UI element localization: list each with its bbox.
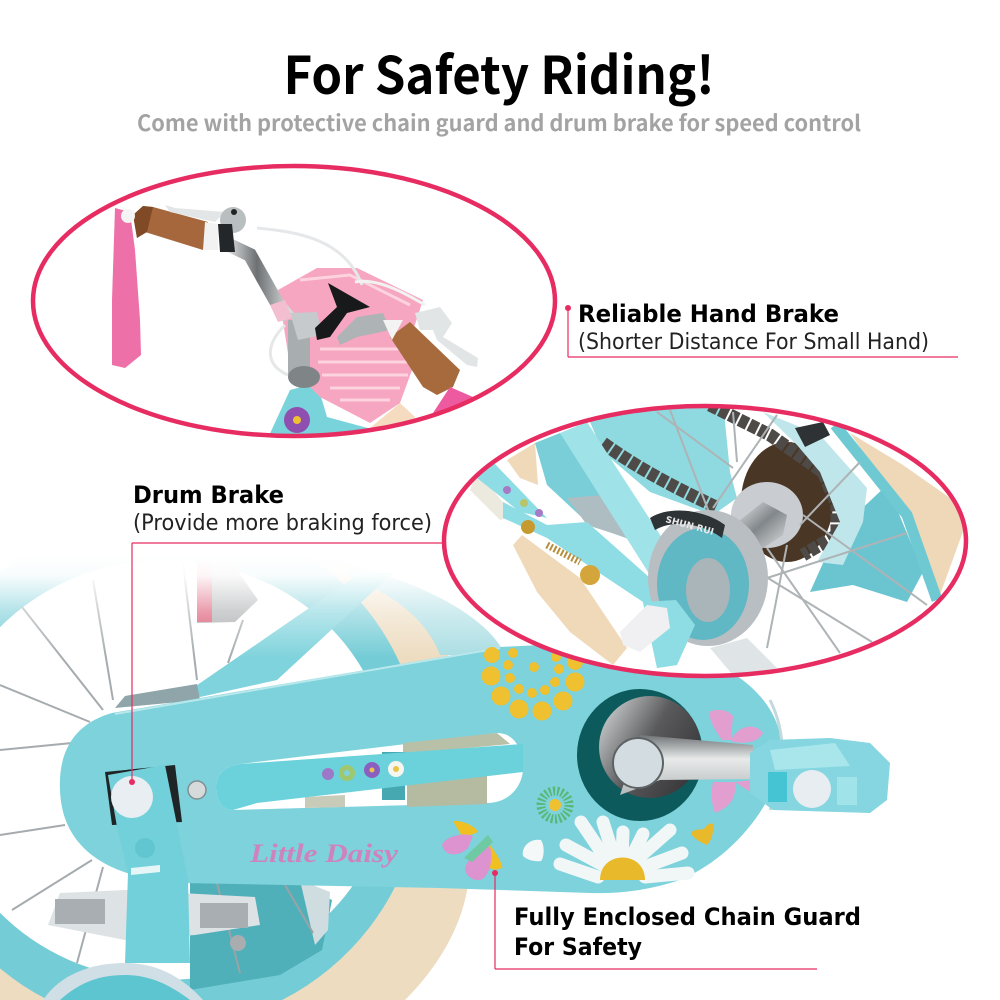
pink basket [278,268,423,423]
frame flower [284,407,310,433]
right tassel [433,387,473,425]
left clamp [218,224,235,252]
callout: hand brake: (Shorter Distance For Small Hand) [578,330,929,355]
white bar [470,470,520,520]
left tyre [513,535,627,665]
upper chain [710,405,837,555]
rear wheel rim [0,576,400,1000]
ellipse border [33,166,555,436]
callout: drum brake: (Provide more braking force) [133,511,432,536]
wheel interior [0,576,363,980]
right grip [390,322,460,395]
gold nut [580,565,600,585]
chain stay tube [216,744,523,810]
valve [795,422,830,447]
right rim [835,425,937,600]
flowers on the tube [322,761,404,781]
clamp [290,312,322,340]
chrome crank disc [599,696,701,798]
daisy decal [560,822,688,880]
fender [763,412,867,565]
seat stay [197,578,378,697]
callout: chain guard: For Safety [514,933,642,961]
drum [648,510,768,646]
callout: hand brake [565,300,958,357]
spokes [657,410,927,653]
gold bolt [521,520,535,534]
subtitle: Come with protective chain guard and drum brake for speed control [137,106,861,138]
ellipse photo: drum brake [440,400,970,685]
right tyre [850,433,970,595]
spokes [0,579,244,964]
rear wheel tyre [0,555,470,1000]
brake knob [620,605,670,652]
yellow dots decal [482,647,584,720]
stem [288,320,310,375]
center black clamp [315,283,370,340]
training wheel [43,963,203,1000]
bottom white bar [710,638,777,680]
right bar [337,313,390,345]
drum brake arm [108,765,190,963]
drum brake knob [111,776,153,818]
title: For Safety Riding! [284,34,714,109]
right brake lever [415,307,478,367]
dark stay [535,433,637,542]
bell [220,207,246,233]
tyre [370,403,415,428]
ellipse photo: drum brake: SHUN RUI [664,515,715,538]
Little Daisy logo: Little Daisy [249,839,399,868]
crank arm [620,735,753,795]
pink butterfly decal [709,710,763,813]
left collar [203,222,218,250]
chain stay [560,422,697,612]
pale fender [376,579,501,655]
drum label [650,511,725,538]
ellipse photo: hand brake [30,160,560,440]
handlebar left [225,243,289,318]
crank hole [577,689,703,821]
callout: chain guard [492,870,861,969]
photo scene: chain guard and rear wheel [0,574,890,1000]
ellipse border [444,406,966,676]
inner disc [810,485,923,602]
brake cable [257,228,362,285]
guard screw [188,781,206,799]
stay flowers [503,486,511,494]
yellow heart decal [691,823,713,845]
callout: drum brake: Drum Brake [133,481,284,509]
drum brake window [105,765,182,825]
sprocket [741,442,833,562]
chain [603,443,716,507]
chain guard [60,640,782,893]
reflector [48,890,260,940]
tassel plug [121,209,135,223]
guard slot [216,733,523,810]
hub bolt [230,935,246,951]
callout: hand brake: Reliable Hand Brake [578,300,839,328]
guard rim shadow [770,700,782,810]
green flower decal [541,791,569,819]
callout: chain guard: Fully Enclosed Chain Guard [514,903,861,931]
lower spokes [217,883,313,973]
hub flange [731,482,803,548]
left grip [133,206,208,250]
grey back plate [115,684,200,708]
tassel [112,208,141,368]
top fade overlay [0,555,510,658]
fork tip [643,600,695,668]
frame [270,387,368,434]
white heart decal [523,840,544,861]
rear brake bracket [197,578,258,623]
frame plate [590,402,737,515]
callout: drum brake [129,481,445,785]
lower arm [503,502,690,668]
bracket [567,495,627,538]
butterfly decal [442,821,502,880]
gold spring [547,545,580,562]
left brake lever [165,205,225,222]
mudguard under the chain guard [190,880,332,990]
pedal [750,738,890,813]
axle [730,502,787,552]
